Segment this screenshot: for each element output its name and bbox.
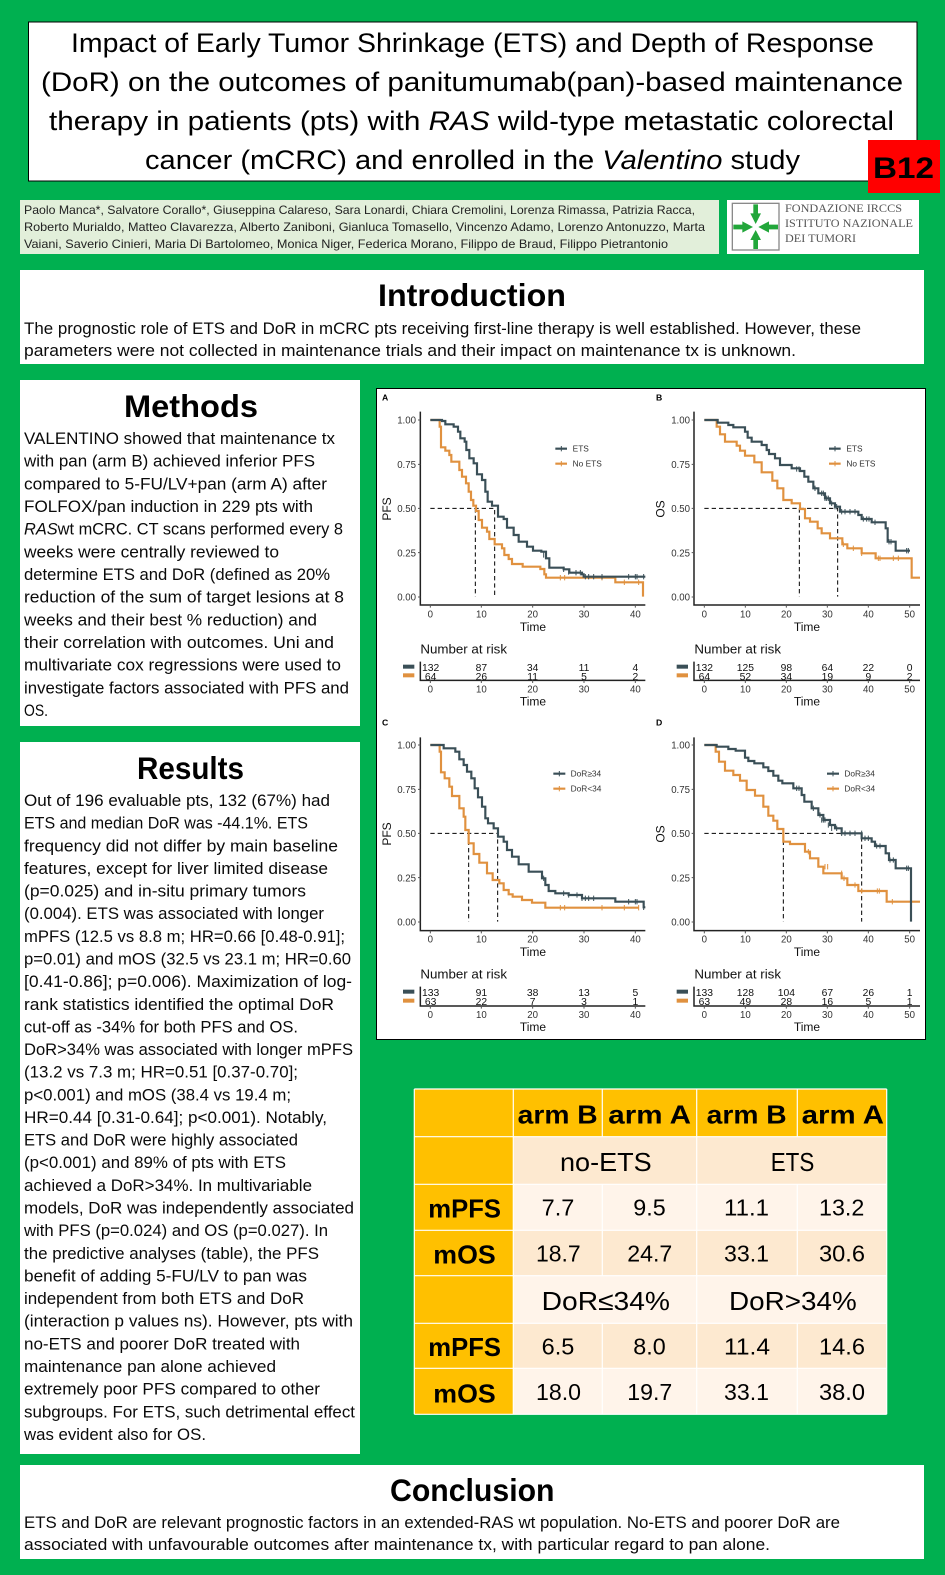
y axis and labels: 0.50 — [671, 829, 690, 840]
methods text: weeks were centrally reviewed to — [23, 542, 279, 561]
number at risk table: 5 — [865, 997, 871, 1008]
row: mOS by DoR: 38.0 — [819, 1379, 865, 1405]
curve: No ETS — [704, 420, 920, 578]
introduction text — [24, 319, 861, 360]
number at risk table: 19 — [822, 672, 833, 683]
results text: HR=0.44 [0.31-0.64]; p<0.001). Notably, — [24, 1108, 327, 1127]
x axis labels: 40 — [863, 609, 874, 620]
number at risk table — [677, 966, 920, 1034]
curve: DoR<34 — [430, 745, 639, 910]
institution name: DEI TUMORI — [785, 233, 856, 245]
x axis labels — [428, 609, 641, 634]
subgroup row: DoR — [542, 1286, 857, 1316]
x axis labels: Time — [794, 620, 820, 634]
x axis labels: 10 — [476, 935, 487, 946]
number at risk table: 2 — [632, 672, 638, 683]
legend — [829, 444, 876, 469]
y axis and labels: 1.00 — [397, 741, 416, 752]
legend: DoR<34 — [571, 784, 602, 794]
table header row: arm B — [518, 1099, 598, 1129]
legend — [555, 444, 602, 469]
number at risk table: Number at risk — [420, 641, 507, 656]
results text: ETS and DoR were highly associated — [24, 1131, 298, 1150]
chart letter: B — [656, 393, 662, 403]
number at risk table: 10 — [740, 685, 751, 696]
row: mPFS by DoR: mPFS — [428, 1332, 501, 1362]
number at risk table: 1 — [632, 997, 638, 1008]
y axis and labels: 1.00 — [671, 741, 690, 752]
authors panel: Vaiani, Saverio Cinieri, Maria Di Bartolomeo, Monica Niger, Federica Morano, Filippo de Braud, Filippo Pietrantonio — [24, 237, 668, 251]
results text: the predictive analyses (table), the PFS — [24, 1244, 319, 1263]
results text: no-ETS and poorer DoR treated with — [24, 1334, 300, 1353]
y axis and labels — [380, 412, 645, 608]
x axis labels: 20 — [781, 609, 792, 620]
row: mOS by ETS: mOS — [433, 1239, 496, 1269]
number at risk table: 22 — [476, 997, 487, 1008]
curve: No ETS — [430, 420, 643, 597]
median guide lines — [430, 508, 495, 597]
row: mPFS by ETS: mPFS — [428, 1193, 501, 1223]
results text: features, except for liver limited disease — [24, 859, 328, 878]
chart C: PFS by DoR — [380, 718, 645, 1034]
chart letter: D — [656, 718, 662, 728]
number at risk table: 9 — [865, 672, 871, 683]
introduction text: parameters were not collected in maintenance trials and their impact on maintenance tx is unknown. — [24, 341, 796, 360]
number at risk table: 0 — [907, 663, 913, 674]
x axis labels: 40 — [630, 609, 641, 620]
number at risk table: 3 — [581, 997, 587, 1008]
y axis and labels — [654, 412, 920, 608]
x axis labels: 30 — [822, 609, 833, 620]
y axis and labels: 0.25 — [671, 873, 690, 884]
number at risk table: 63 — [699, 997, 710, 1008]
number at risk table: 11 — [527, 672, 538, 683]
number at risk table: 13 — [578, 988, 590, 999]
median guide lines — [704, 508, 838, 597]
results text: frequency did not differ by main baseline — [24, 836, 338, 855]
number at risk table: 50 — [904, 1010, 915, 1021]
y axis and labels: 0.00 — [397, 593, 416, 604]
number at risk table: 30 — [822, 1010, 833, 1021]
panel: introduction — [20, 270, 924, 364]
number at risk table: 91 — [476, 988, 487, 999]
results text: (0.004). ETS was associated with longer — [24, 904, 324, 923]
x axis labels: 10 — [740, 609, 751, 620]
number at risk table: 133 — [422, 988, 440, 999]
methods text: weeks and their best % reduction) and — [23, 610, 317, 629]
row: mPFS by ETS: 9.5 — [633, 1195, 666, 1221]
number at risk table: Number at risk — [694, 641, 781, 656]
chart B: OS by ETS — [654, 393, 920, 709]
title text: therapy in patients (pts) with RAS wild-type metastatic colorectal — [49, 106, 894, 136]
number at risk table: 52 — [740, 672, 751, 683]
number at risk table: 4 — [632, 663, 638, 674]
x axis labels — [428, 935, 641, 959]
number at risk table: 2 — [907, 672, 913, 683]
methods text: reduction of the sum of target lesions at 8 — [24, 588, 344, 607]
number at risk table: 20 — [781, 685, 792, 696]
number at risk table — [403, 641, 645, 709]
methods text: OS. — [24, 701, 48, 720]
number at risk table: 125 — [737, 663, 754, 674]
institution name: ISTITUTO NAZIONALE — [785, 218, 913, 230]
y axis and labels: 0.00 — [671, 918, 690, 929]
y axis and labels: 0.25 — [671, 548, 690, 559]
methods text: VALENTINO showed that maintenance tx — [24, 429, 335, 448]
number at risk table: 40 — [863, 1010, 874, 1021]
number at risk table: 104 — [778, 988, 795, 999]
number at risk table: 87 — [476, 663, 487, 674]
institution name — [785, 203, 913, 245]
number at risk table: 30 — [579, 685, 589, 696]
x axis labels: 20 — [527, 609, 538, 620]
y axis and labels: PFS — [380, 497, 394, 521]
number at risk table: 10 — [476, 685, 487, 696]
heading: introduction: Introduction — [378, 277, 566, 313]
curve: DoR>=34 — [704, 745, 911, 922]
number at risk table: 26 — [476, 672, 487, 683]
number at risk table: 5 — [581, 672, 587, 683]
number at risk table: 34 — [781, 672, 792, 683]
number at risk table: 40 — [630, 1010, 641, 1021]
number at risk table: 16 — [822, 997, 833, 1008]
row: mPFS by ETS: 13.2 — [819, 1195, 864, 1221]
legend: DoR≥34 — [571, 769, 602, 779]
methods text: their correlation with outcomes. Uni and — [24, 633, 334, 652]
number at risk table: Time — [794, 695, 820, 709]
authors panel — [20, 200, 719, 254]
y axis and labels — [654, 737, 920, 933]
x axis labels — [702, 609, 915, 634]
number at risk table: 49 — [740, 997, 751, 1008]
row: mOS by DoR — [433, 1379, 865, 1409]
number at risk table: 20 — [527, 1010, 538, 1021]
row: mOS by ETS — [433, 1239, 865, 1269]
number at risk table: 64 — [822, 663, 833, 674]
number at risk table: 10 — [476, 1010, 487, 1021]
x axis labels: 0 — [702, 935, 707, 946]
number at risk table: 0 — [702, 1010, 707, 1021]
number at risk table: 5 — [632, 988, 638, 999]
introduction text: The prognostic role of ETS and DoR in mCRC pts receiving first-line therapy is well established. However, these — [24, 319, 861, 338]
results text: (13.2 vs 7.3 m; HR=0.51 [0.37-0.70]; — [24, 1063, 298, 1082]
y axis and labels: 0.75 — [671, 785, 690, 796]
conclusion text — [24, 1513, 840, 1554]
row: mPFS by ETS — [428, 1193, 864, 1223]
results text: (interaction p values ns). However, pts with — [24, 1312, 353, 1331]
row: mOS by DoR: 18.0 — [536, 1379, 581, 1405]
x axis labels: 50 — [904, 609, 915, 620]
number at risk table: 1 — [907, 988, 913, 999]
title text: (DoR) on the outcomes of panitumumab(pan)-based maintenance — [41, 67, 903, 97]
y axis and labels: 0.75 — [671, 460, 690, 471]
number at risk table: 132 — [422, 663, 440, 674]
table: outcomes by arm — [414, 1089, 887, 1414]
legend: ETS — [846, 444, 863, 454]
x axis labels: 10 — [740, 935, 751, 946]
results text: cut-off as -34% for both PFS and OS. — [24, 1017, 298, 1036]
number at risk table: 20 — [527, 685, 538, 696]
results text: benefit of adding 5-FU/LV to pan was — [24, 1266, 307, 1285]
y axis and labels: 0.75 — [397, 785, 416, 796]
number at risk table: 98 — [781, 663, 792, 674]
x axis labels: Time — [520, 620, 546, 634]
x axis labels: 30 — [822, 935, 833, 946]
chart letter: C — [382, 718, 389, 728]
number at risk table: 7 — [530, 997, 536, 1008]
number at risk table: 0 — [428, 685, 433, 696]
x axis labels: 30 — [579, 609, 589, 620]
results text: subgroups. For ETS, such detrimental effect — [24, 1402, 355, 1421]
legend: No ETS — [573, 459, 602, 469]
y axis and labels: OS — [654, 500, 668, 518]
methods text — [23, 429, 349, 720]
row: mPFS by DoR: 11.4 — [724, 1333, 770, 1359]
row: mPFS by DoR: 6.5 — [542, 1333, 574, 1359]
results text: was evident also for OS. — [23, 1425, 206, 1444]
number at risk table: Time — [520, 695, 546, 709]
methods text: multivariate cox regressions were used to — [24, 656, 341, 675]
methods text: determine ETS and DoR (defined as 20% — [24, 565, 330, 584]
x axis labels: 0 — [428, 609, 433, 620]
row: mOS by ETS: 33.1 — [724, 1241, 769, 1267]
heading: methods: Methods — [124, 388, 258, 424]
x axis labels: 20 — [781, 935, 792, 946]
y axis and labels: 0.25 — [397, 873, 416, 884]
number at risk table: 0 — [702, 685, 707, 696]
curve: DoR<34 — [704, 745, 920, 904]
row: mOS by DoR: 19.7 — [627, 1379, 672, 1405]
y axis and labels — [380, 737, 645, 933]
y axis and labels: 1.00 — [397, 416, 416, 427]
y axis and labels: 0.75 — [397, 460, 416, 471]
methods text: compared to 5-FU/LV+pan (arm A) after — [24, 474, 327, 493]
curve: DoR>=34 — [430, 745, 645, 910]
heading: results: Results — [137, 750, 244, 786]
legend: DoR<34 — [844, 784, 875, 794]
number at risk table: 63 — [425, 997, 437, 1008]
number at risk table — [677, 641, 920, 709]
authors panel: Roberto Murialdo, Matteo Clavarezza, Alberto Zaniboni, Gianluca Tomasello, Vincenzo Adamo, Lorenzo Antonuzzo, Marta — [24, 220, 705, 234]
number at risk table: Number at risk — [694, 966, 781, 981]
number at risk table: 64 — [425, 672, 437, 683]
title text: Impact of Early Tumor Shrinkage (ETS) and Depth of Response — [71, 28, 874, 58]
heading: conclusion: Conclusion — [390, 1472, 554, 1508]
chart D: OS by DoR — [654, 718, 920, 1034]
results text: mPFS (12.5 vs 8.8 m; HR=0.66 [0.48-0.91]; — [24, 927, 345, 946]
y axis and labels: OS — [654, 825, 668, 843]
number at risk table: 132 — [696, 663, 713, 674]
results text: maintenance pan alone achieved — [24, 1357, 276, 1376]
methods text: investigate factors associated with PFS and — [24, 678, 349, 697]
row: mPFS by ETS: 7.7 — [542, 1195, 574, 1221]
number at risk table: 0 — [428, 1010, 433, 1021]
x axis labels: 30 — [579, 935, 589, 946]
curve: ETS — [704, 420, 910, 553]
legend: ETS — [573, 444, 589, 454]
legend — [827, 769, 875, 794]
row: mPFS by DoR — [428, 1332, 865, 1362]
number at risk table: 128 — [737, 988, 754, 999]
x axis labels: 10 — [476, 609, 487, 620]
methods text: RASwt mCRC. CT scans performed every 8 — [24, 520, 343, 539]
number at risk table: 30 — [579, 1010, 589, 1021]
y axis and labels: 0.50 — [397, 829, 416, 840]
panel: conclusion — [20, 1465, 924, 1559]
number at risk table: 38 — [527, 988, 539, 999]
row: mOS by ETS: 30.6 — [819, 1241, 865, 1267]
number at risk table: 11 — [579, 663, 590, 674]
subgroup row: ETS: ETS — [771, 1147, 814, 1177]
title text — [41, 28, 903, 175]
row: mOS by DoR: mOS — [433, 1379, 496, 1409]
number at risk table: 133 — [696, 988, 713, 999]
authors panel: Paolo Manca*, Salvatore Corallo*, Giuseppina Calareso, Sara Lonardi, Chiara Cremolini, Lorenza Rimassa, Patrizia Racca, — [24, 203, 695, 217]
subgroup row: DoR: DoR>34% — [729, 1286, 857, 1316]
x axis labels: 0 — [428, 935, 433, 946]
x axis labels — [702, 935, 915, 959]
subgroup row: ETS: no-ETS — [560, 1147, 652, 1177]
logo panel — [727, 200, 919, 254]
x axis labels: 40 — [863, 935, 874, 946]
x axis labels: 50 — [904, 935, 915, 946]
results text: [0.41-0.86]; p=0.006). Maximization of log- — [24, 972, 352, 991]
conclusion text: ETS and DoR are relevant prognostic factors in an extended-RAS wt population. No-ETS and poorer DoR are — [24, 1513, 840, 1532]
results text: DoR>34% was associated with longer mPFS — [24, 1040, 353, 1059]
number at risk table: 67 — [822, 988, 833, 999]
number at risk table: Time — [794, 1020, 820, 1034]
results text: achieved a DoR>34%. In multivariable — [24, 1176, 312, 1195]
number at risk table: 1 — [907, 997, 913, 1008]
legend: No ETS — [846, 459, 876, 469]
row: mPFS by DoR: 14.6 — [819, 1333, 865, 1359]
number at risk table: 20 — [781, 1010, 792, 1021]
results text: independent from both ETS and DoR — [24, 1289, 304, 1308]
chart letter: A — [382, 393, 389, 403]
subgroup row: ETS — [560, 1147, 814, 1177]
curve: ETS — [430, 420, 645, 579]
icon: green arrows cross — [732, 203, 779, 250]
results text: Out of 196 evaluable pts, 132 (67%) had — [24, 791, 330, 810]
number at risk table: 40 — [630, 685, 641, 696]
results text: ETS and median DoR was -44.1%. ETS — [24, 814, 308, 833]
median guide lines — [430, 833, 498, 922]
results text: p<0.001) and mOS (38.4 vs 19.4 m; — [24, 1085, 291, 1104]
median guide lines — [704, 833, 862, 922]
results text — [23, 791, 355, 1444]
y axis and labels: 0.25 — [397, 548, 416, 559]
y axis and labels: 0.50 — [397, 504, 416, 515]
number at risk table: 50 — [904, 685, 915, 696]
results text: (p<0.001) and 89% of pts with ETS — [24, 1153, 286, 1172]
number at risk table: 10 — [740, 1010, 751, 1021]
results text: (p=0.025) and in-situ primary tumors — [24, 882, 306, 901]
panel: methods — [20, 380, 360, 726]
number at risk table: 22 — [863, 663, 874, 674]
number at risk table: 34 — [527, 663, 539, 674]
panel: results — [20, 742, 360, 1454]
number at risk table: 40 — [863, 685, 874, 696]
table header row: arm A — [802, 1099, 884, 1129]
title box — [28, 22, 917, 181]
number at risk table: 64 — [699, 672, 710, 683]
y axis and labels: PFS — [380, 822, 394, 846]
x axis labels: Time — [520, 945, 546, 959]
y axis and labels: 0.50 — [671, 504, 690, 515]
y axis and labels: 1.00 — [671, 416, 690, 427]
methods text: with pan (arm B) achieved inferior PFS — [23, 452, 315, 471]
table header row — [518, 1099, 884, 1129]
number at risk table: 28 — [781, 997, 792, 1008]
chart A: PFS by ETS — [380, 393, 645, 709]
row: mPFS by ETS: 11.1 — [724, 1195, 769, 1221]
x axis labels: 40 — [630, 935, 641, 946]
x axis labels: 20 — [527, 935, 538, 946]
badge: B12: B12 — [873, 152, 934, 185]
institution name: FONDAZIONE IRCCS — [785, 203, 902, 215]
results text: extremely poor PFS compared to other — [24, 1380, 320, 1399]
title text: cancer (mCRC) and enrolled in the Valentino study — [145, 145, 801, 175]
results text: p=0.01) and mOS (32.5 vs 23.1 m; HR=0.60 — [24, 950, 351, 968]
number at risk table: 30 — [822, 685, 833, 696]
row: mOS by ETS: 24.7 — [627, 1241, 672, 1267]
y axis and labels: 0.00 — [671, 593, 690, 604]
panel: survival curves figure — [376, 388, 926, 1040]
number at risk table: Time — [520, 1020, 546, 1034]
row: mOS by DoR: 33.1 — [724, 1379, 769, 1405]
conclusion text: associated with unfavourable outcomes after maintenance tx, with particular regard to pan alone. — [24, 1535, 770, 1554]
legend: DoR≥34 — [844, 769, 875, 779]
x axis labels: 0 — [702, 609, 707, 620]
number at risk table: Number at risk — [420, 966, 507, 981]
results text: rank statistics identified the optimal DoR — [24, 995, 334, 1014]
y axis and labels: 0.00 — [397, 918, 416, 929]
table header row: arm A — [608, 1099, 691, 1129]
results text: with PFS (p=0.024) and OS (p=0.027). In — [23, 1221, 328, 1240]
subgroup row: DoR: DoR≤34% — [542, 1286, 670, 1316]
number at risk table: 26 — [863, 988, 874, 999]
badge: B12 — [868, 140, 940, 193]
methods text: FOLFOX/pan induction in 229 pts with — [24, 497, 313, 516]
number at risk table — [403, 966, 645, 1034]
row: mPFS by DoR: 8.0 — [633, 1333, 666, 1359]
legend — [553, 769, 602, 794]
row: mOS by ETS: 18.7 — [536, 1241, 581, 1267]
table header row: arm B — [707, 1099, 787, 1129]
x axis labels: Time — [794, 945, 820, 959]
results text: models, DoR was independently associated — [24, 1198, 354, 1218]
